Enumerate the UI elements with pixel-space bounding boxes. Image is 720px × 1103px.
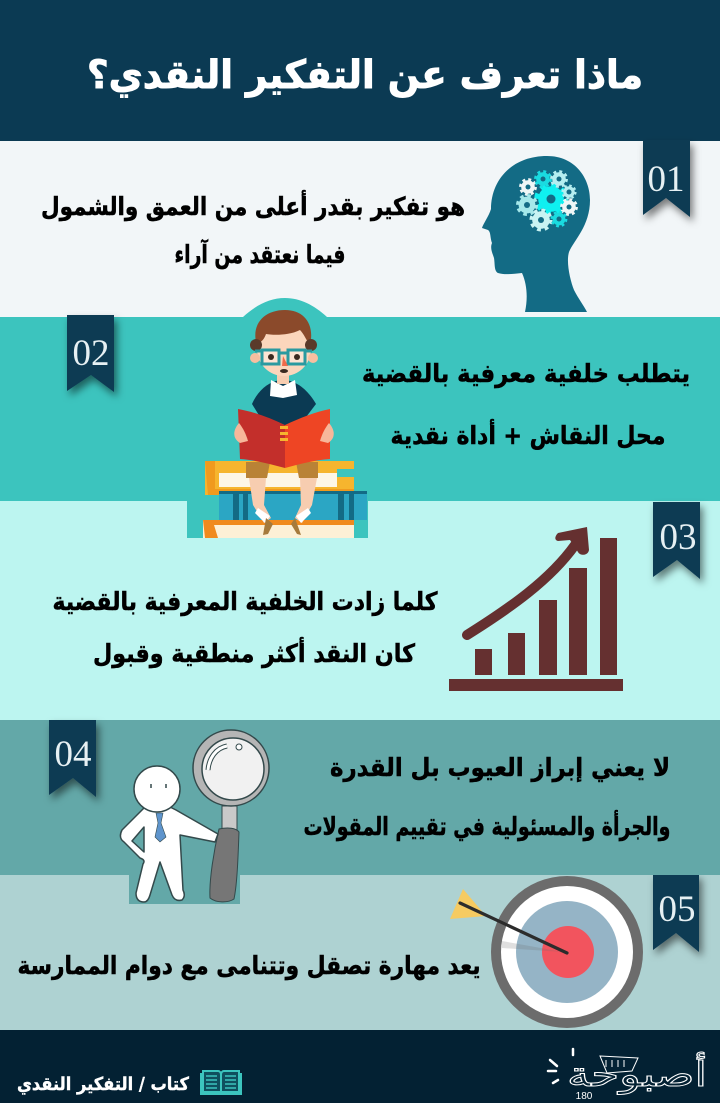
text: panel 01: هو تفكير بقدر أعلى من العمق والشمول [41, 190, 465, 222]
text: panel 02: محل النقاش + أداة نقدية [390, 419, 666, 450]
title: ماذا تعرف عن التفكير النقدي؟ [87, 53, 643, 98]
text: panel 02: يتطلب خلفية معرفية بالقضية [362, 359, 690, 389]
ribbon 02: 02 [72, 333, 110, 374]
panel 04: what it means [0, 720, 720, 904]
ribbon 03 [653, 502, 700, 579]
text: panel 03 [52, 587, 438, 669]
header band [0, 0, 720, 141]
icon: target with arrow [450, 876, 643, 1028]
ribbon 01 [643, 140, 690, 217]
ribbon 04: 04 [54, 734, 92, 775]
bar chart with rising arrow [449, 527, 623, 691]
text: panel 01 [41, 190, 465, 270]
logo: Osbooha 180: 180 [576, 1091, 593, 1102]
text: panel 03: كلما زادت الخلفية المعرفية بالقضية [52, 587, 438, 617]
logo: Osbooha 180: أصبوحة [567, 1052, 707, 1095]
logo: Osbooha 180 [548, 1049, 707, 1102]
ribbon 05 [653, 874, 699, 952]
panel 05: skill [0, 874, 720, 1030]
icon: head with gears [482, 156, 590, 312]
panel 01: definition [0, 140, 720, 317]
ribbon 03: 03 [660, 517, 696, 558]
icon: open book [201, 1071, 241, 1094]
illustration: boy reading on books [203, 310, 367, 538]
text: panel 04 [304, 753, 670, 842]
illustration: man with magnifying glass [120, 730, 269, 902]
ribbon 04 [49, 720, 96, 797]
ribbon 01: 01 [648, 159, 684, 200]
ribbon 02 [67, 315, 114, 392]
book title: كتاب / التفكير النقدي [17, 1074, 189, 1095]
text: panel 02 [362, 359, 690, 450]
text: panel 04: لا يعني إبراز العيوب بل القدرة [330, 753, 670, 783]
panel 02: requirements [0, 298, 720, 538]
text: panel 01: فيما نعتقد من آراء [174, 239, 346, 270]
text: panel 05: يعد مهارة تصقل وتتنامى مع دوام الممارسة [18, 951, 480, 981]
panel 03: growth [0, 501, 720, 720]
text: panel 03: كان النقد أكثر منطقية وقبول [93, 637, 415, 669]
footer band [0, 1030, 720, 1103]
ribbon 05: 05 [658, 889, 696, 930]
